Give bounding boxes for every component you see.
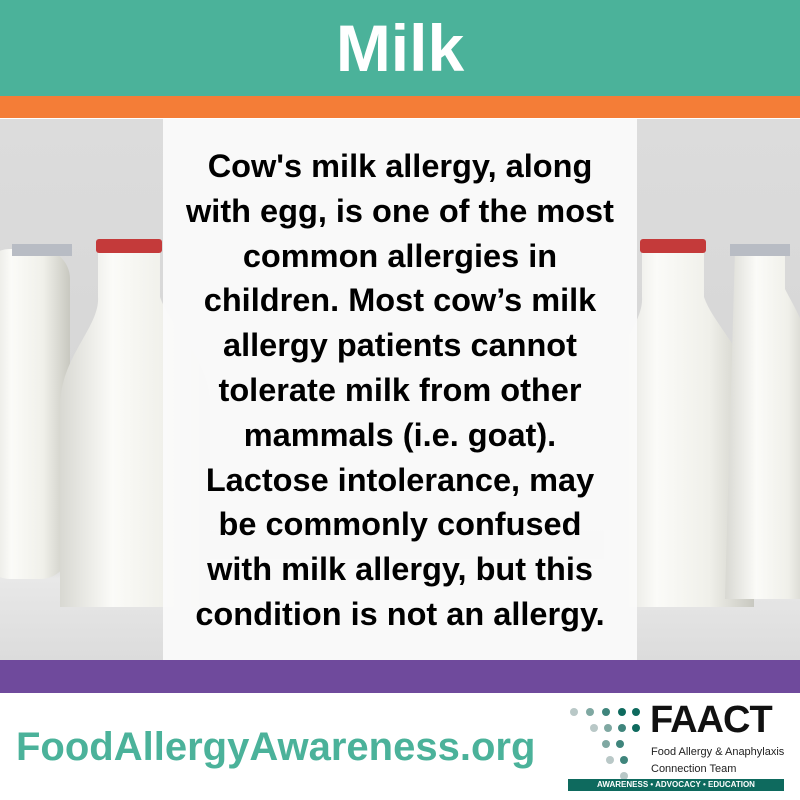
purple band	[0, 660, 800, 693]
photo: milk bottles background	[0, 119, 800, 660]
body text: with egg, is one of the most	[186, 193, 614, 229]
logo tagline bar: AWARENESS • ADVOCACY • EDUCATION	[597, 780, 755, 789]
left bottles	[0, 239, 210, 607]
title: Milk	[336, 11, 464, 85]
icon: dot grid	[570, 708, 640, 779]
logo subtitle: Food Allergy & Anaphylaxis	[651, 746, 784, 758]
orange band	[0, 96, 800, 118]
body text: be commonly confused	[218, 506, 581, 542]
body text: mammals (i.e. goat).	[244, 417, 556, 453]
logo wordmark: FAACT	[650, 699, 772, 741]
body text	[186, 148, 614, 632]
body text: with milk allergy, but this	[207, 551, 593, 587]
body text: tolerate milk from other	[218, 372, 582, 408]
body text: Lactose intolerance, may	[206, 462, 594, 498]
logo subtitle: Connection Team	[651, 763, 736, 775]
body text: common allergies in	[243, 238, 557, 274]
body text: Cow's milk allergy, along	[208, 148, 592, 184]
text panel	[163, 119, 637, 660]
right bottles	[604, 239, 800, 607]
logo subtitle	[651, 746, 784, 775]
header: title bar	[0, 0, 800, 96]
website url: FoodAllergyAwareness.org	[16, 725, 535, 769]
body text: children. Most cow’s milk	[204, 282, 596, 318]
logo: FAACT	[568, 699, 784, 791]
body text: condition is not an allergy.	[195, 596, 605, 632]
body text: allergy patients cannot	[223, 327, 577, 363]
logo tagline bar	[568, 779, 784, 791]
